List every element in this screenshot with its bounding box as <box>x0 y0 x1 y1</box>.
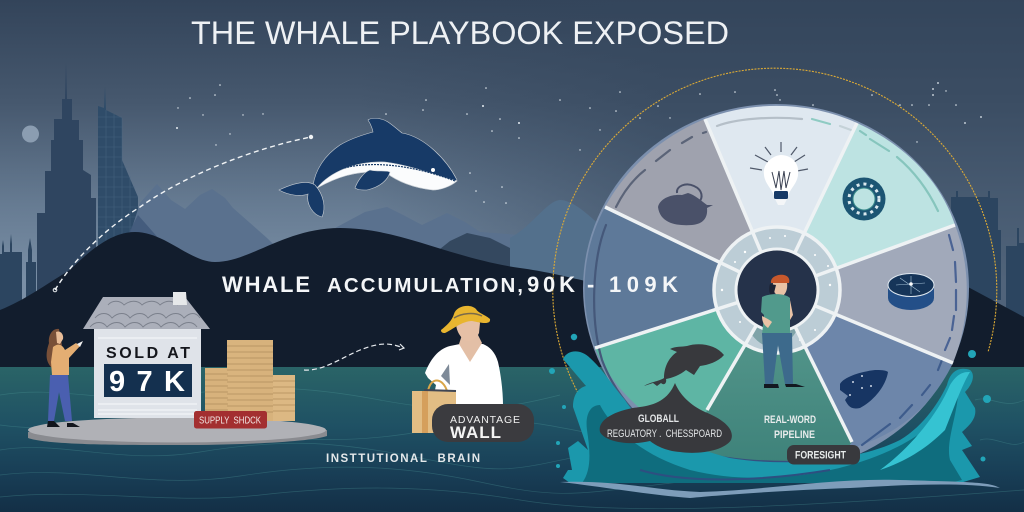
platform <box>28 418 327 445</box>
callout: global regulatory chessboard: REGUATORY . CHESSPOARD <box>607 428 722 440</box>
segment: right, compass <box>777 225 967 363</box>
mountains <box>120 184 600 290</box>
right city skyline <box>951 191 1024 320</box>
label: real-word pipeline: REAL-WORD <box>764 414 816 426</box>
icon: compass <box>888 274 934 310</box>
wheel dashed inner track <box>594 118 956 462</box>
callout: foresight <box>787 445 860 464</box>
shopping bag <box>412 380 456 433</box>
headline: whale accumulation: 109K <box>609 272 678 297</box>
icon: lightbulb <box>750 142 808 205</box>
callout: global regulatory chessboard <box>600 383 732 453</box>
wheel spokes <box>595 119 955 442</box>
left city skyline <box>0 63 138 320</box>
label: real-word pipeline: PIPELINE <box>774 429 815 441</box>
dashed arrow to institutional figure <box>304 344 404 370</box>
roof <box>83 297 210 329</box>
segment: top, lightbulb <box>705 106 857 290</box>
title: THE WHALE PLAYBOOK EXPOSED <box>191 15 729 51</box>
icon: kettle <box>658 184 713 225</box>
headline: whale accumulation <box>222 272 678 297</box>
badge: supply shock: SUPPLY SHDCK <box>199 416 261 426</box>
callout: advantage wall <box>432 404 534 442</box>
callout: foresight: FORESIGHT <box>795 450 846 462</box>
sold at text: SOLD AT <box>106 345 190 362</box>
headline: whale accumulation: - <box>587 272 594 297</box>
coin stacks <box>205 340 295 421</box>
dashed trajectory arrow to whale <box>53 135 313 292</box>
headline: whale accumulation: ACCUMULATION, <box>327 274 523 297</box>
icon: dolphin <box>644 344 724 386</box>
dark foreground hill <box>0 228 1024 372</box>
stars <box>176 82 982 204</box>
institutional figure <box>425 306 503 405</box>
icon: fish <box>840 370 888 408</box>
hub centre <box>736 249 818 331</box>
gold orbit ring <box>553 68 997 393</box>
segment: upper right, ring <box>777 123 955 290</box>
wheel <box>583 104 969 472</box>
segment: upper left, kettle <box>605 119 777 290</box>
sea <box>0 367 1024 512</box>
callout: advantage wall: ADVANTAGE <box>450 414 520 426</box>
icon: ring <box>842 178 886 220</box>
label: institutional brain: INSTTUTIONAL BRAIN <box>326 453 480 465</box>
callout: global regulatory chessboard: GLOBALL <box>638 413 679 425</box>
icon: whale <box>279 118 457 217</box>
chimney <box>173 292 187 305</box>
price text: 97K <box>109 366 185 398</box>
headline: whale accumulation: 90K <box>527 272 575 297</box>
segment: lower left, dolphin <box>595 290 777 440</box>
segment: bottom, green <box>690 290 852 470</box>
badge: supply shock <box>194 411 267 428</box>
central figure <box>761 275 805 388</box>
woman figure <box>47 329 83 427</box>
label: real-word pipeline <box>764 414 816 441</box>
moon <box>22 126 39 142</box>
wheel base disc <box>583 104 969 472</box>
segment: lower right, fish <box>777 290 953 470</box>
house: sold at 97K <box>83 292 210 418</box>
segment: left <box>585 207 777 348</box>
headline: whale accumulation: WHALE <box>222 272 310 297</box>
callout: advantage wall: WALL <box>450 423 501 442</box>
price plate <box>104 364 192 397</box>
wall <box>94 329 201 418</box>
hub ring <box>714 227 840 353</box>
water splash <box>549 334 1000 498</box>
